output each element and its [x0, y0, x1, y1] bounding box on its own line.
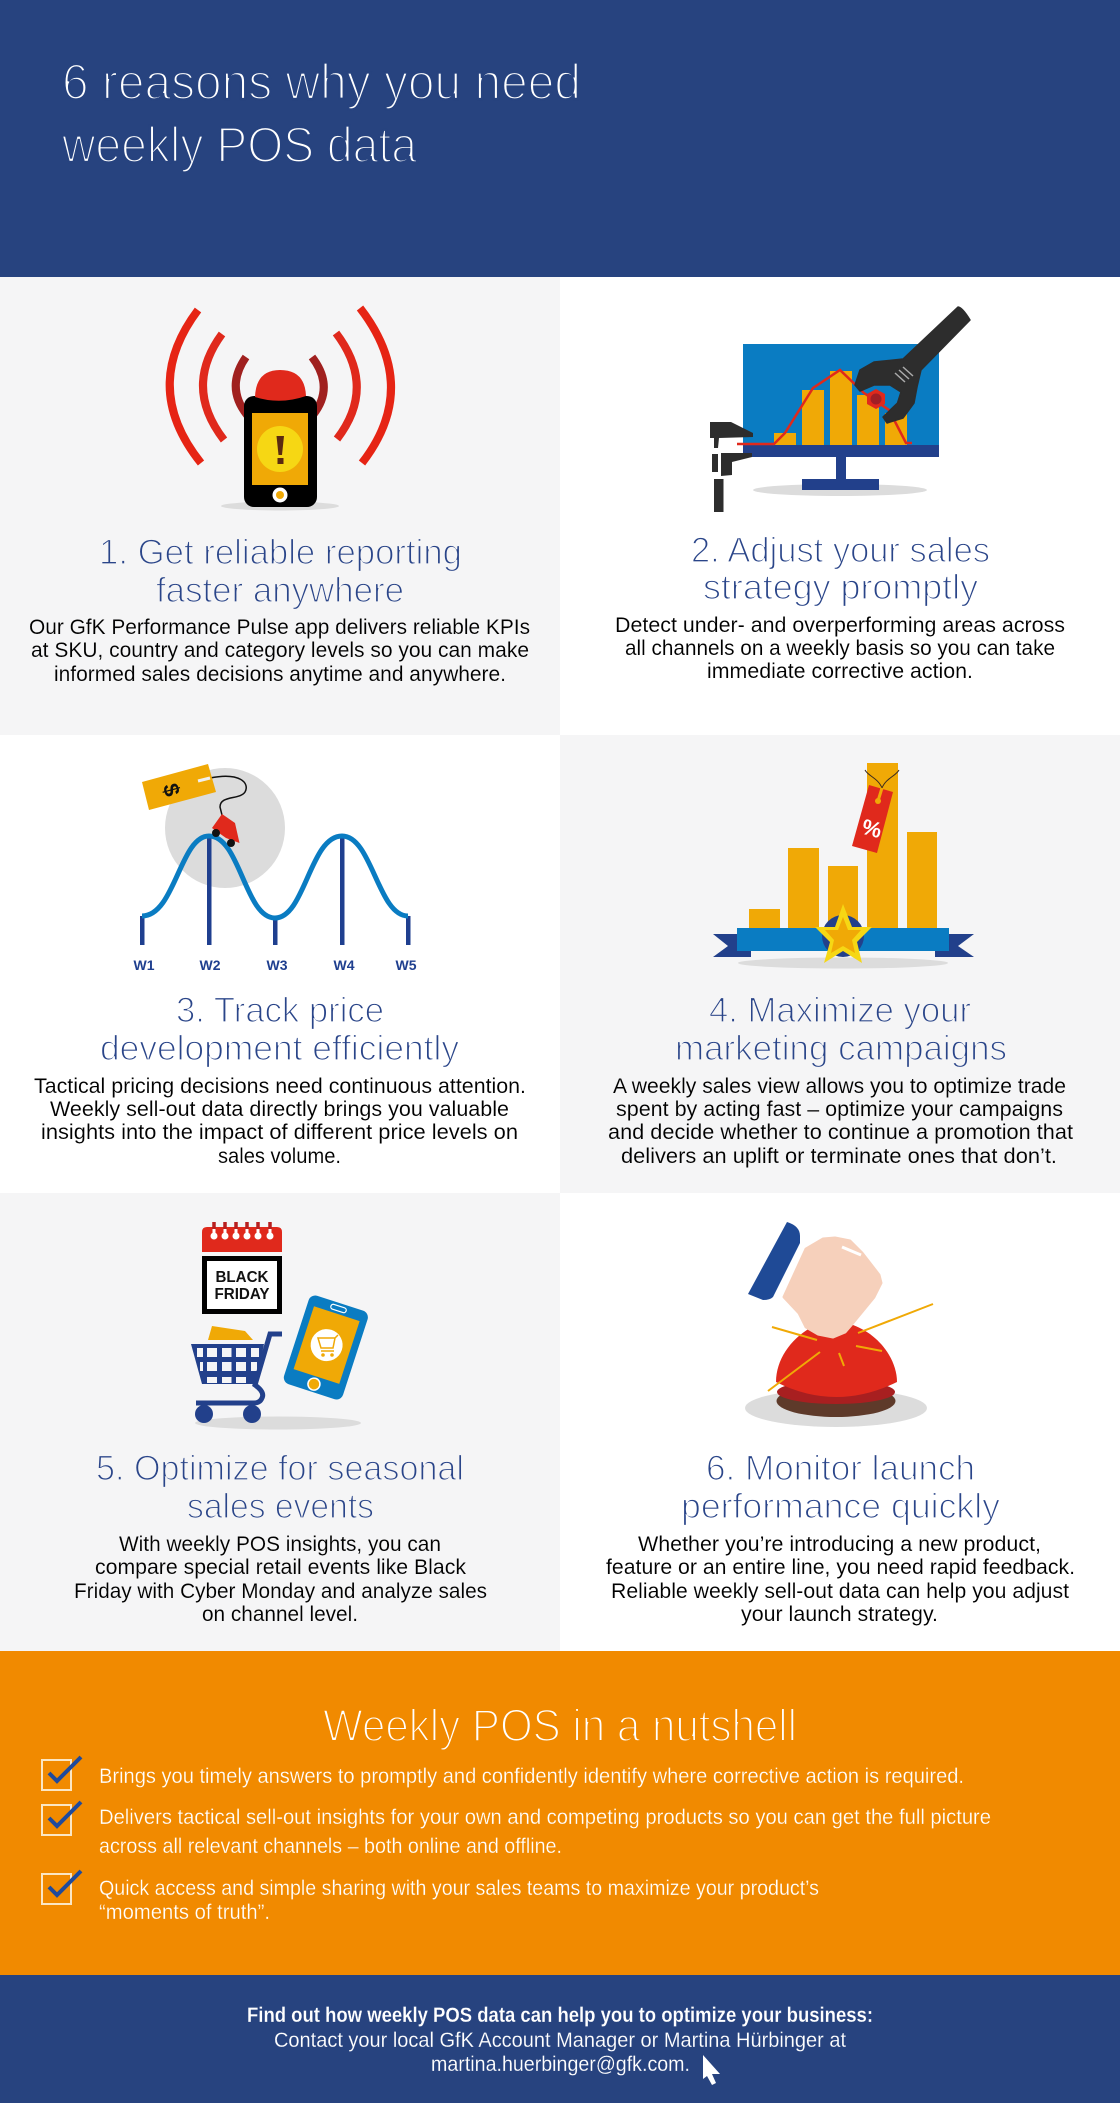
body text 2: immediate corrective action. — [707, 659, 973, 683]
body text 1: at SKU, country and category levels so you can make — [31, 638, 529, 662]
body text 3: sales volume. — [218, 1144, 341, 1168]
footer call to action: martina.huerbinger@gfk.com. — [431, 2052, 690, 2076]
footer banner — [0, 1975, 1120, 2103]
heading 1: 1. Get reliable reporting — [99, 532, 462, 572]
icon: mouse cursor — [703, 2055, 720, 2085]
panel: reason 6 — [560, 1193, 1120, 1651]
nutshell bullet list: across all relevant channels – both online and offline. — [99, 1835, 562, 1858]
icon: calendar, cart and phone: FRIDAY — [214, 1286, 270, 1303]
body text 1: Our GfK Performance Pulse app delivers reliable KPIs — [29, 615, 530, 639]
body text 5: on channel level. — [202, 1602, 358, 1626]
heading 6: 6. Monitor launch — [706, 1448, 975, 1488]
heading 6 — [681, 1448, 1000, 1526]
icon: checkbox 1 — [42, 1757, 81, 1790]
nutshell bullet list: Quick access and simple sharing with your sales teams to maximize your product’s — [99, 1877, 819, 1900]
icon: phone alarm — [170, 308, 391, 510]
body text 5: compare special retail events like Black — [95, 1555, 466, 1579]
icon: calendar, cart and phone: BLACK — [216, 1269, 269, 1286]
heading 2 — [691, 530, 990, 607]
body text 2 — [615, 613, 1065, 683]
body text 6: Whether you’re introducing a new product, — [638, 1532, 1041, 1556]
heading 3 — [100, 990, 459, 1068]
heading 5 — [96, 1448, 464, 1526]
body text 3: Weekly sell-out data directly brings you valuable — [50, 1097, 509, 1121]
nutshell bullet list: Brings you timely answers to promptly and confidently identify where corrective action is required. — [99, 1765, 964, 1788]
heading 2: strategy promptly — [703, 567, 978, 607]
panel: reason 3 — [0, 735, 560, 1193]
footer call to action — [247, 2003, 873, 2076]
body text 6: your launch strategy. — [741, 1602, 938, 1626]
body text 1 — [29, 615, 530, 686]
icon: checkbox 2 — [42, 1802, 81, 1835]
panel: reason 2 — [560, 277, 1120, 735]
body text 6 — [606, 1532, 1075, 1626]
body text 4: A weekly sales view allows you to optimize trade — [613, 1074, 1066, 1098]
nutshell bullet list — [99, 1765, 991, 1924]
body text 4: spent by acting fast – optimize your campaigns — [616, 1097, 1063, 1121]
icon: weekly price rollercoaster chart: W5 — [396, 957, 417, 973]
heading 1 — [99, 532, 462, 610]
body text 5: With weekly POS insights, you can — [119, 1532, 441, 1556]
footer call to action: Contact your local GfK Account Manager or Martina Hürbinger at — [274, 2028, 846, 2052]
heading 5: 5. Optimize for seasonal — [96, 1448, 464, 1488]
title: weekly POS data — [61, 117, 417, 173]
header banner — [0, 0, 1120, 277]
body text 4: and decide whether to continue a promotion that — [608, 1120, 1073, 1144]
heading 4: marketing campaigns — [675, 1028, 1007, 1068]
icon: weekly price rollercoaster chart: W1 — [134, 957, 155, 973]
body text 5 — [74, 1532, 487, 1626]
icon: weekly price rollercoaster chart: W4 — [334, 957, 355, 973]
icon: monitor with wrench — [710, 307, 970, 512]
body text 1: informed sales decisions anytime and anywhere. — [54, 662, 506, 686]
icon: campaign bar chart with ribbon: % — [859, 814, 885, 843]
icon: weekly price rollercoaster chart — [134, 764, 417, 973]
body text 3 — [34, 1074, 526, 1168]
icon: calendar, cart and phone — [191, 1222, 370, 1430]
icon: weekly price rollercoaster chart: W2 — [200, 957, 221, 973]
title — [61, 54, 581, 173]
nutshell bullet list: Delivers tactical sell-out insights for your own and competing products so you can get the full picture — [99, 1806, 991, 1829]
panel: reason 5 — [0, 1193, 560, 1651]
heading 6: performance quickly — [681, 1486, 1000, 1526]
heading 1: faster anywhere — [156, 570, 404, 610]
heading 3: 3. Track price — [176, 990, 384, 1030]
panel: reason 4 — [560, 735, 1120, 1193]
body text 4 — [608, 1074, 1073, 1168]
heading 5: sales events — [187, 1486, 374, 1526]
body text 6: feature or an entire line, you need rapid feedback. — [606, 1555, 1075, 1579]
nutshell bullet list: “moments of truth”. — [99, 1901, 270, 1924]
body text 2: all channels on a weekly basis so you can take — [625, 636, 1055, 660]
body text 2: Detect under- and overperforming areas across — [615, 613, 1065, 637]
body text 3: insights into the impact of different price levels on — [41, 1120, 518, 1144]
panel: weekly POS in a nutshell — [0, 1651, 1120, 1975]
icon: hand pressing red button — [745, 1222, 933, 1427]
body text 5: Friday with Cyber Monday and analyze sales — [74, 1579, 487, 1603]
footer call to action: Find out how weekly POS data can help you to optimize your business: — [247, 2003, 873, 2027]
heading 3: development efficiently — [100, 1028, 459, 1068]
icon: checkbox 3 — [42, 1871, 81, 1904]
heading 2: 2. Adjust your sales — [691, 530, 990, 570]
icon: weekly price rollercoaster chart: W3 — [266, 957, 288, 973]
panel: reason 1 — [0, 277, 560, 735]
body text 3: Tactical pricing decisions need continuous attention. — [34, 1074, 526, 1098]
heading 4 — [675, 990, 1007, 1068]
body text 6: Reliable weekly sell-out data can help you adjust — [611, 1579, 1069, 1603]
icon: weekly price rollercoaster chart: $ — [158, 781, 185, 799]
title: 6 reasons why you need — [62, 54, 581, 110]
body text 4: delivers an uplift or terminate ones that don’t. — [621, 1144, 1057, 1168]
heading 4: 4. Maximize your — [709, 990, 971, 1030]
icon: campaign bar chart with ribbon — [713, 763, 974, 968]
nutshell heading: Weekly POS in a nutshell — [323, 1700, 797, 1751]
